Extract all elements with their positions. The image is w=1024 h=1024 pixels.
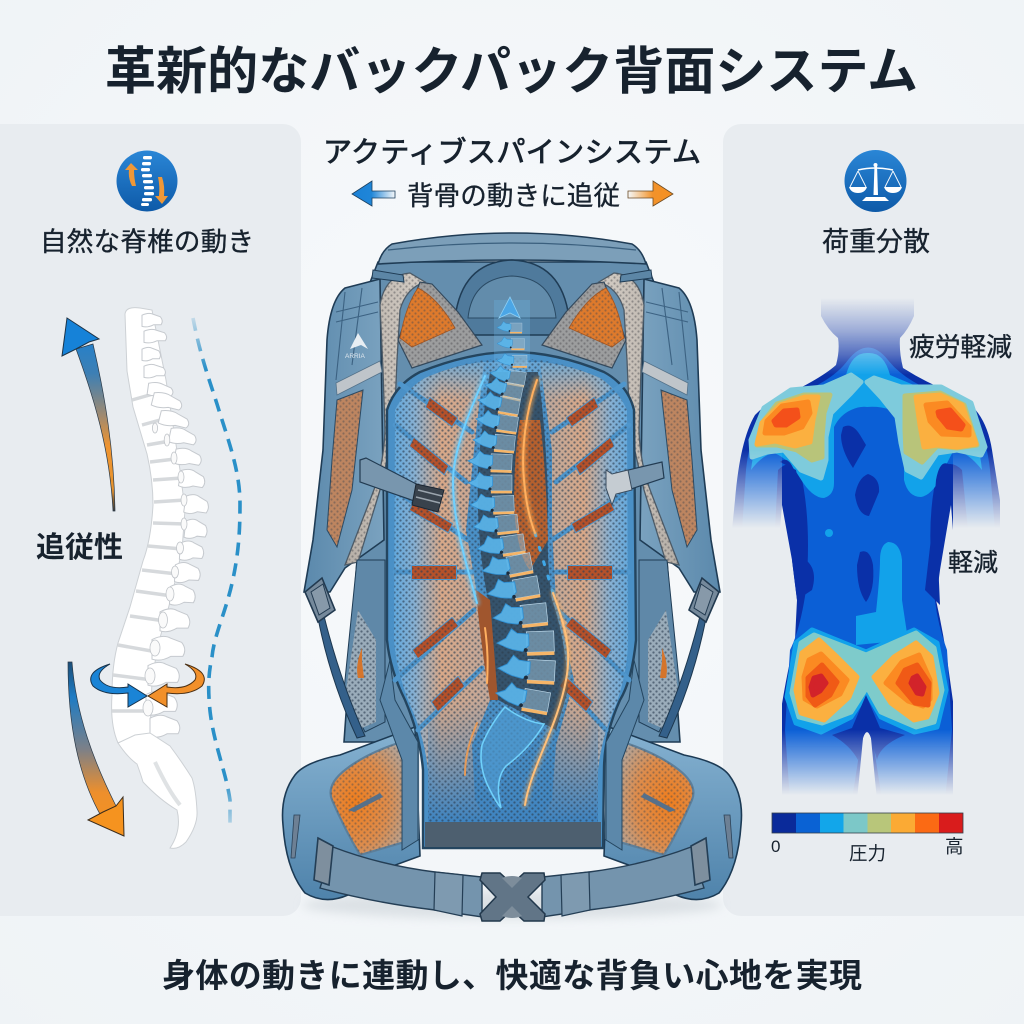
- top lid: [378, 233, 646, 264]
- sternum strap right: [606, 462, 664, 505]
- main body: [344, 262, 680, 742]
- body silhouette: [732, 292, 1000, 800]
- belt shadow: [302, 891, 722, 919]
- text: follows spine: 背骨の動きに追従: [407, 181, 620, 211]
- icon: spine with arrows: [116, 150, 178, 212]
- top blue field: [395, 362, 627, 410]
- left pad area: [394, 362, 490, 822]
- label: reduction: 軽減: [948, 549, 998, 577]
- arrow: right orange: [628, 181, 673, 206]
- translucent spine: [468, 297, 556, 808]
- logo: [345, 333, 368, 360]
- disc lines: [112, 394, 185, 746]
- hip belt buckle: [480, 873, 545, 921]
- panel: natural spine motion: [0, 124, 301, 916]
- dashed motion path: [193, 318, 240, 829]
- pressure legend: 0: [771, 837, 780, 856]
- heading: active spine system: アクティブスパインシステム: [323, 136, 701, 169]
- left panel content: [36, 150, 254, 848]
- right pad area: [540, 362, 628, 822]
- hip pressure: [787, 630, 946, 732]
- label: tracking: 追従性: [36, 531, 123, 564]
- logo: ARRIA: [345, 353, 366, 360]
- light blue band: [751, 353, 982, 498]
- illustration: white spine: [112, 308, 210, 848]
- facets: [143, 423, 187, 716]
- title: 革新的なバックパック背面システム: [105, 43, 918, 100]
- label: fatigue reduction: 疲労軽減: [909, 332, 1012, 362]
- right panel content: [732, 150, 1012, 864]
- heading: natural spine motion: 自然な脊椎の動き: [40, 227, 254, 257]
- backpack illustration: [282, 233, 742, 921]
- vertebra body column: [112, 308, 185, 743]
- pad row seams: [395, 384, 629, 730]
- dark patches: [780, 426, 950, 605]
- sacrum: [118, 733, 197, 848]
- top handle: [455, 260, 569, 335]
- arrow: left blue: [352, 181, 395, 206]
- left half of pack: [282, 270, 482, 917]
- mid blue: [742, 348, 995, 800]
- center back panel: [380, 352, 644, 850]
- orange vent slots: [410, 398, 614, 711]
- central channel: [476, 300, 568, 730]
- right half of pack: [542, 270, 742, 917]
- heading: load distribution: 荷重分散: [822, 227, 930, 257]
- pressure legend: 圧力: [849, 843, 886, 864]
- mesh dots: [394, 358, 628, 822]
- shoulder pressure layers: [751, 375, 985, 478]
- glow line: blue: [453, 376, 553, 603]
- pressure legend: [771, 813, 964, 864]
- glow line: orange: [465, 380, 568, 805]
- pressure legend: 高: [945, 836, 964, 857]
- arrows: rotation: [91, 664, 204, 707]
- sacrum: [481, 707, 544, 808]
- lid seam: [388, 243, 636, 250]
- arrow: up curve: [62, 318, 115, 511]
- sternum strap left: [360, 458, 444, 512]
- footer message: 身体の動きに連動し、快適な背負い心地を実現: [162, 957, 862, 994]
- mesh pads: [394, 358, 629, 822]
- light blue patches: [825, 529, 908, 645]
- pressure heatmap: [732, 292, 1000, 800]
- icon: balance scale: [844, 150, 906, 212]
- slot mesh: [410, 398, 614, 711]
- arrow: down curve: [68, 662, 124, 836]
- bottom blue field: [428, 700, 598, 822]
- panel: load distribution: [723, 124, 1024, 916]
- subheading: follows spine motion: [352, 181, 673, 211]
- lower navy patch: [832, 695, 905, 760]
